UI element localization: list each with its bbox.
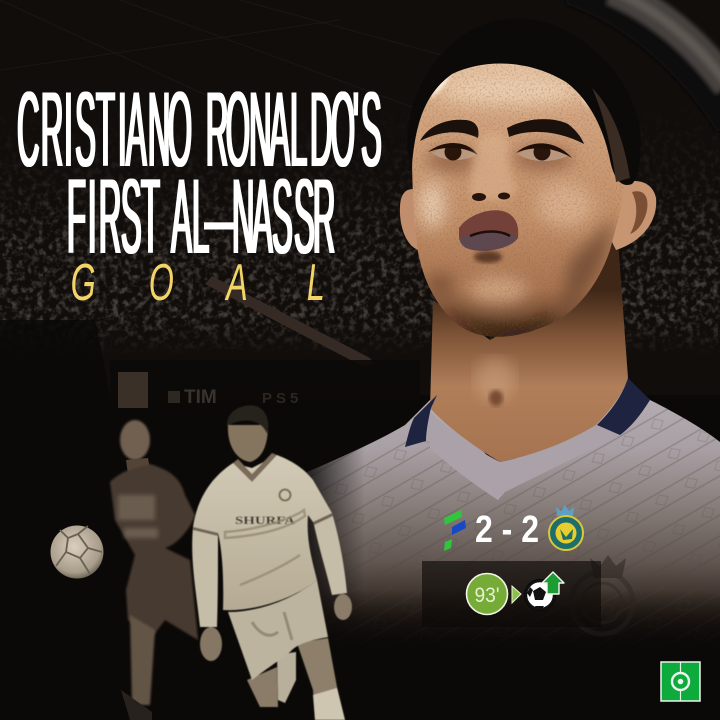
- minute panel: [422, 561, 601, 627]
- sleeve stripes: [193, 513, 333, 536]
- forehead corner glints: [430, 72, 592, 108]
- match ball: [50, 526, 104, 578]
- goal subtitle: A: [224, 254, 248, 312]
- scoreline: [444, 505, 583, 551]
- shorts: [228, 580, 328, 680]
- crest on shirt: [280, 490, 290, 500]
- white boot: [277, 652, 296, 703]
- title lines: [17, 70, 382, 276]
- neck: [430, 240, 628, 462]
- rear leg: [247, 667, 278, 707]
- left ear: [400, 189, 418, 250]
- neck highlight: [475, 358, 515, 402]
- right hand: [334, 594, 352, 620]
- eyes: [428, 143, 572, 161]
- goal subtitle: G: [71, 254, 96, 312]
- skin shading: [412, 64, 624, 337]
- title line 1: CRISTIANO RONALDO'S: [17, 70, 382, 189]
- navy collar: [405, 378, 650, 447]
- main player portrait: [306, 54, 720, 632]
- right ear: [606, 181, 656, 250]
- advertising boards: PS5: [262, 390, 302, 407]
- stadium light arc top right: [570, 0, 720, 125]
- head: [227, 405, 268, 462]
- jersey: [193, 455, 332, 610]
- faint club crest on jersey: [571, 555, 633, 634]
- goal subtitle: O: [149, 254, 174, 312]
- score text: 2 - 2: [475, 509, 539, 551]
- hair: [407, 18, 641, 185]
- minute badge: 93': [474, 584, 500, 607]
- collar trim: [233, 453, 277, 482]
- sock: [313, 688, 345, 720]
- background: dark stadium: [0, 0, 720, 360]
- goal subtitle: [71, 254, 325, 312]
- goal ball icon: [524, 580, 556, 610]
- secondary player: opponent: [110, 420, 198, 720]
- up arrow icon: [542, 572, 564, 594]
- title line 2: FIRST AL—NASSR: [67, 157, 335, 276]
- shirt shading: [225, 510, 305, 585]
- left hand: [200, 627, 222, 661]
- minute badge: [466, 574, 508, 614]
- collar inner panel: [428, 410, 620, 500]
- goal subtitle: L: [307, 254, 325, 312]
- sponsor text: SHURFA: [235, 513, 295, 527]
- advertising boards: TIM: [184, 387, 217, 408]
- away club logo: [549, 505, 583, 550]
- pursed lips: [459, 210, 518, 263]
- home club logo: [444, 510, 466, 551]
- panel background: [422, 561, 601, 627]
- arrow: [512, 586, 521, 603]
- secondary player: Ronaldo running: [192, 405, 352, 720]
- left arm: [192, 527, 218, 627]
- nose: [469, 133, 516, 201]
- advertising boards: [118, 372, 302, 408]
- face: [412, 60, 625, 337]
- jersey: [285, 378, 720, 650]
- right arm: [313, 513, 347, 595]
- neck hollow shadow: [489, 390, 503, 406]
- front leg: [297, 638, 345, 720]
- BeSoccer logo: [661, 662, 700, 701]
- eyebrows: [420, 119, 584, 144]
- title: [17, 70, 382, 312]
